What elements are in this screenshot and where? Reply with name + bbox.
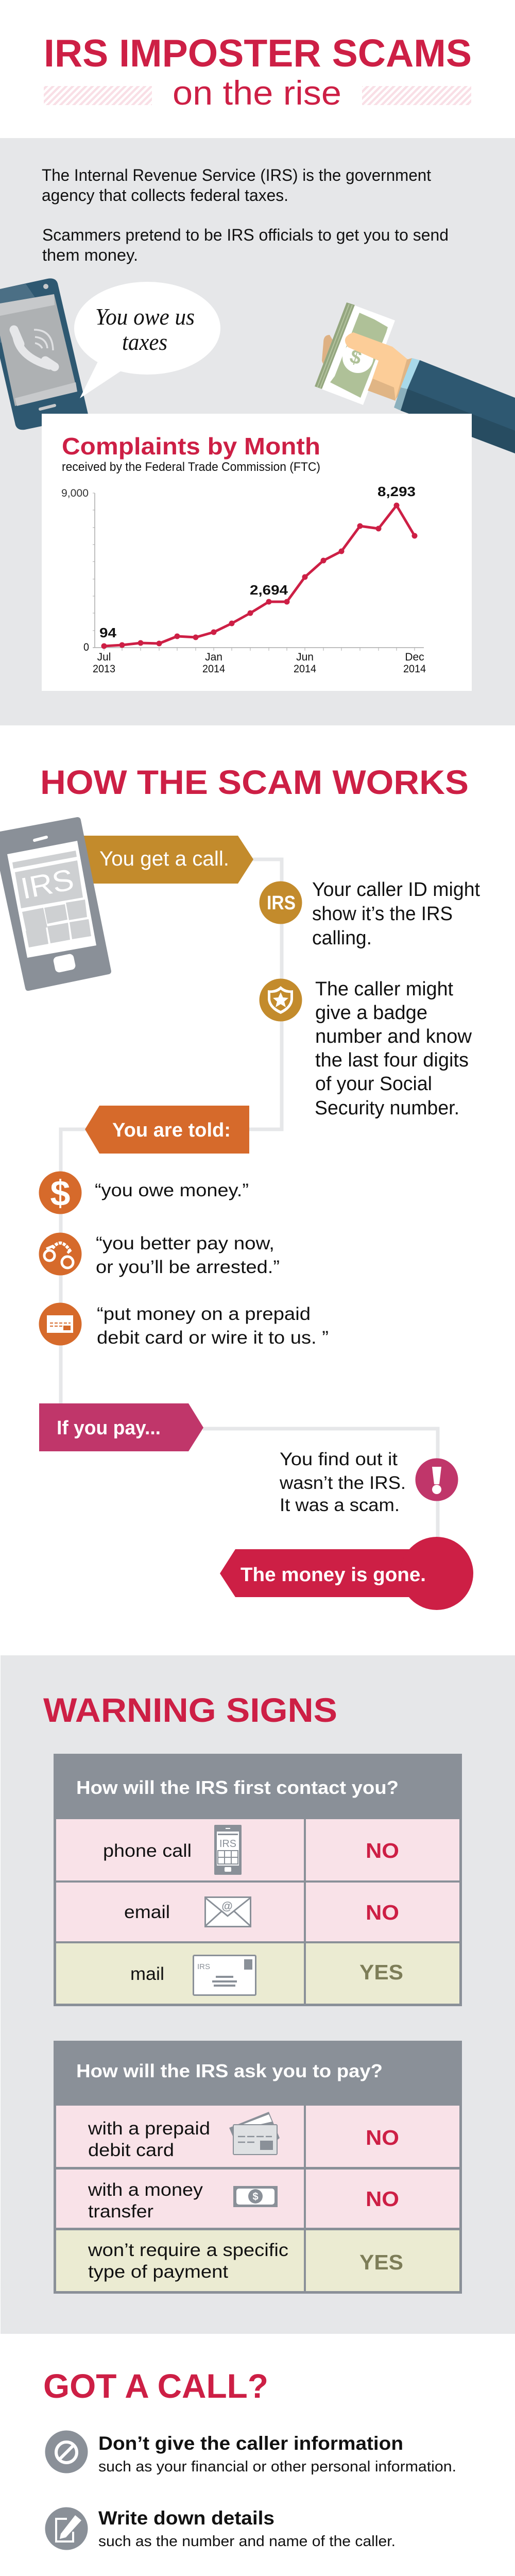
row: phone call: [56, 1819, 459, 1880]
text: badge number: The caller might: [315, 978, 453, 1000]
icon: dollar sign: $: [50, 1173, 70, 1213]
row: prepaid debit card: with a prepaid: [88, 2119, 210, 2139]
icon: exclamation mark: [415, 1458, 458, 1501]
icon: banknote: [233, 2186, 278, 2207]
item: caller ID: [260, 879, 480, 949]
text: badge number: number and know: [315, 1026, 472, 1047]
item: write down details: [45, 2507, 396, 2550]
row: money transfer: [56, 2170, 459, 2228]
icon: smartphone ringing: [0, 278, 89, 430]
x-axis labels: 2014: [294, 663, 316, 675]
subtitle: on the rise: on the rise: [173, 74, 341, 112]
chart title: Complaints by Month: [62, 433, 320, 460]
text: write down details: Write down details: [98, 2507, 274, 2529]
x-axis labels: [93, 651, 426, 675]
item: prepaid card: [39, 1302, 329, 1348]
row: phone call: phone call: [103, 1841, 192, 1861]
x-axis labels: Jan: [205, 651, 222, 663]
icon: prohibited sign: [45, 2431, 88, 2473]
icon: dollar sign: [39, 1172, 81, 1214]
heading: how the scam works: HOW THE SCAM WORKS: [40, 763, 469, 801]
row: email: [56, 1883, 459, 1941]
row: no specific payment: won’t require a specific: [88, 2240, 288, 2260]
x-axis labels: Jun: [296, 651, 314, 663]
intro text: Scammers pretend to be IRS officials to get you to send: [42, 226, 449, 244]
intro text: agency that collects federal taxes.: [42, 186, 288, 205]
table header: How will the IRS first contact you?: [76, 1777, 399, 1798]
row: email: email: [124, 1902, 170, 1922]
item: arrest threat: [39, 1232, 280, 1277]
row: mail: mail: [130, 1964, 164, 1984]
text: write down details: [98, 2507, 396, 2550]
data labels: 2,694: [250, 582, 288, 598]
x-axis labels: Dec: [405, 651, 424, 663]
item: don't give information: [45, 2431, 456, 2475]
table: how will the IRS first contact you: [54, 1754, 462, 2006]
text: it was a scam: It was a scam.: [280, 1495, 400, 1515]
text: it was a scam: You find out it: [280, 1449, 398, 1469]
answer: no: NO: [366, 1839, 399, 1862]
text: badge number: [315, 978, 472, 1119]
text: caller ID: Your caller ID might: [312, 879, 480, 901]
row: prepaid debit card: debit card: [88, 2140, 174, 2160]
heading: warning signs: WARNING SIGNS: [43, 1691, 337, 1729]
icon: letter: IRS: [197, 1962, 210, 1971]
answer: no: NO: [366, 1901, 399, 1924]
text: prepaid card: [97, 1304, 329, 1348]
text: caller ID: show it’s the IRS: [312, 903, 453, 925]
row: no specific payment: [56, 2230, 459, 2291]
row: no specific payment: type of payment: [88, 2262, 228, 2282]
text: you owe money: “you owe money.”: [95, 1180, 249, 1200]
item: you owe money: [39, 1172, 249, 1214]
icon: cards: [229, 2112, 280, 2155]
row: money transfer: transfer: [88, 2201, 153, 2222]
banner: the money is gone: [220, 1537, 473, 1610]
icon: debit card: [39, 1302, 81, 1346]
text: badge number: give a badge: [315, 1002, 427, 1024]
text: it was a scam: [279, 1449, 406, 1515]
text: prepaid card: debit card or wire it to us. ”: [97, 1328, 329, 1348]
text: don't give information: Don’t give the caller information: [98, 2433, 403, 2454]
heading: got a call: GOT A CALL?: [43, 2367, 268, 2405]
chart subtitle: received by the Federal Trade Commission (FTC): [62, 460, 320, 474]
x-axis labels: 2014: [403, 663, 426, 675]
table: how will the IRS ask you to pay: [54, 2041, 462, 2294]
table header: How will the IRS ask you to pay?: [76, 2060, 383, 2081]
text: write down details: such as the number and name of the caller.: [98, 2533, 396, 2550]
data labels: [99, 484, 416, 640]
answer: yes: YES: [359, 2250, 403, 2274]
row: money transfer: with a money: [88, 2180, 203, 2200]
icon: IRS circle: IRS: [267, 892, 296, 914]
title: IRS imposter scams: IRS IMPOSTER SCAMS: [44, 31, 472, 75]
flow connector lines: [61, 859, 438, 1540]
text: caller ID: [312, 879, 480, 949]
intro text: The Internal Revenue Service (IRS) is the government: [42, 166, 431, 184]
text: badge number: the last four digits: [315, 1049, 469, 1071]
banner: you are told: [85, 1106, 249, 1154]
text: don't give information: such as your financial or other personal information.: [98, 2459, 456, 2475]
intro text: them money.: [42, 246, 138, 264]
icon: banknote: $: [252, 2191, 259, 2202]
icon: envelope: [205, 1897, 251, 1927]
answer: no: NO: [366, 2126, 399, 2149]
panel: introduction: [0, 138, 515, 725]
icon: phone: IRS: [219, 1838, 236, 1850]
banner: you are told: You are told:: [112, 1120, 231, 1141]
y-axis labels: 0: [83, 641, 89, 653]
answer: no: NO: [366, 2187, 399, 2211]
left hatched band: [44, 86, 152, 105]
item: badge number: [260, 978, 472, 1119]
line series: [101, 503, 417, 649]
data labels: 8,293: [377, 484, 416, 499]
icon: handcuffs: [39, 1232, 81, 1276]
banner: if you pay: If you pay...: [57, 1417, 161, 1439]
text: arrest threat: [96, 1233, 280, 1277]
text: prepaid card: “put money on a prepaid: [97, 1304, 311, 1324]
icon: phone with IRS on screen: IRS: [18, 862, 77, 906]
text: arrest threat: “you better pay now,: [96, 1233, 274, 1253]
right hatched band: [362, 86, 471, 105]
intro text: [42, 166, 449, 264]
text: caller ID: calling.: [312, 927, 372, 949]
text: badge number: of your Social: [315, 1073, 432, 1095]
x-axis labels: Jul: [97, 651, 111, 663]
icon: badge circle: [260, 979, 302, 1021]
speech bubble: You owe us taxes: taxes: [122, 329, 167, 355]
icon: envelope: @: [221, 1900, 233, 1912]
text: badge number: Security number.: [315, 1097, 459, 1119]
icon: pencil and paper: [45, 2507, 88, 2550]
x-axis labels: 2014: [202, 663, 225, 675]
row: mail: [56, 1943, 459, 2004]
row: prepaid debit card: [56, 2106, 459, 2167]
y-axis labels: 9,000: [61, 487, 89, 499]
text: arrest threat: or you’ll be arrested.”: [96, 1257, 280, 1277]
icon: phone: [214, 1825, 242, 1875]
speech bubble: You owe us taxes: You owe us: [95, 303, 195, 330]
y-axis labels: [61, 487, 89, 653]
text: it was a scam: wasn’t the IRS.: [279, 1473, 406, 1493]
icon: IRS circle: [260, 881, 302, 924]
banner: you get a call: [77, 836, 253, 884]
icon: hand holding money: [315, 302, 515, 453]
data labels: 94: [99, 625, 117, 640]
answer: yes: YES: [359, 1960, 403, 1984]
step: you get a call: [0, 817, 253, 991]
title block: [44, 31, 472, 112]
banner: you get a call: You get a call.: [99, 848, 229, 870]
icon: hand holding money: $: [348, 346, 364, 369]
x-axis labels: 2013: [93, 663, 115, 675]
item: it was a scam: [279, 1449, 458, 1515]
banner: if you pay: [39, 1403, 203, 1451]
speech bubble: You owe us taxes: [74, 282, 220, 398]
icon: phone with IRS on screen: [0, 817, 111, 991]
banner: the money is gone: The money is gone.: [241, 1564, 426, 1586]
axes: [93, 493, 424, 651]
panel: warning signs: [1, 1655, 515, 2334]
icon: letter: [194, 1956, 255, 1995]
text: don't give information: [98, 2433, 456, 2475]
panel: complaints by month chart: [42, 414, 472, 691]
